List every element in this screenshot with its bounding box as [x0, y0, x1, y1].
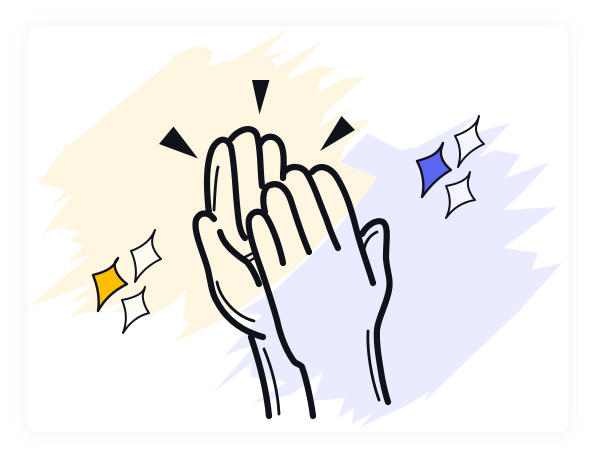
- sparkle: white upper: [131, 230, 161, 282]
- card: [26, 26, 570, 434]
- sparkles: left group: [93, 230, 161, 333]
- back hand fingers: [207, 140, 245, 238]
- front hand fourth finger: [312, 167, 373, 283]
- burst: left: [159, 126, 198, 158]
- front hand second finger: [263, 184, 309, 252]
- sparkle: blue: [417, 143, 451, 197]
- back hand thumb and wrist: [195, 214, 263, 337]
- front hand first finger and wrist: [249, 212, 313, 416]
- burst: right: [320, 116, 355, 151]
- front hand thumb and wrist: [362, 221, 390, 402]
- brush stroke: lavender: [213, 115, 562, 428]
- brush stroke: yellow: [30, 28, 377, 343]
- front hand thin lines: [364, 232, 377, 250]
- burst: top: [252, 80, 270, 114]
- sparkle: yellow: [93, 258, 127, 311]
- sparkle: white lower: [446, 172, 475, 218]
- front hand: [249, 167, 390, 416]
- sparkle: white lower: [122, 287, 149, 333]
- sparkles: right group: [417, 116, 484, 218]
- sparkle: white upper: [455, 116, 484, 167]
- back hand thin lines: [214, 167, 218, 210]
- burst marks: [159, 80, 355, 158]
- front hand third finger: [283, 167, 338, 248]
- back hand: [195, 129, 284, 416]
